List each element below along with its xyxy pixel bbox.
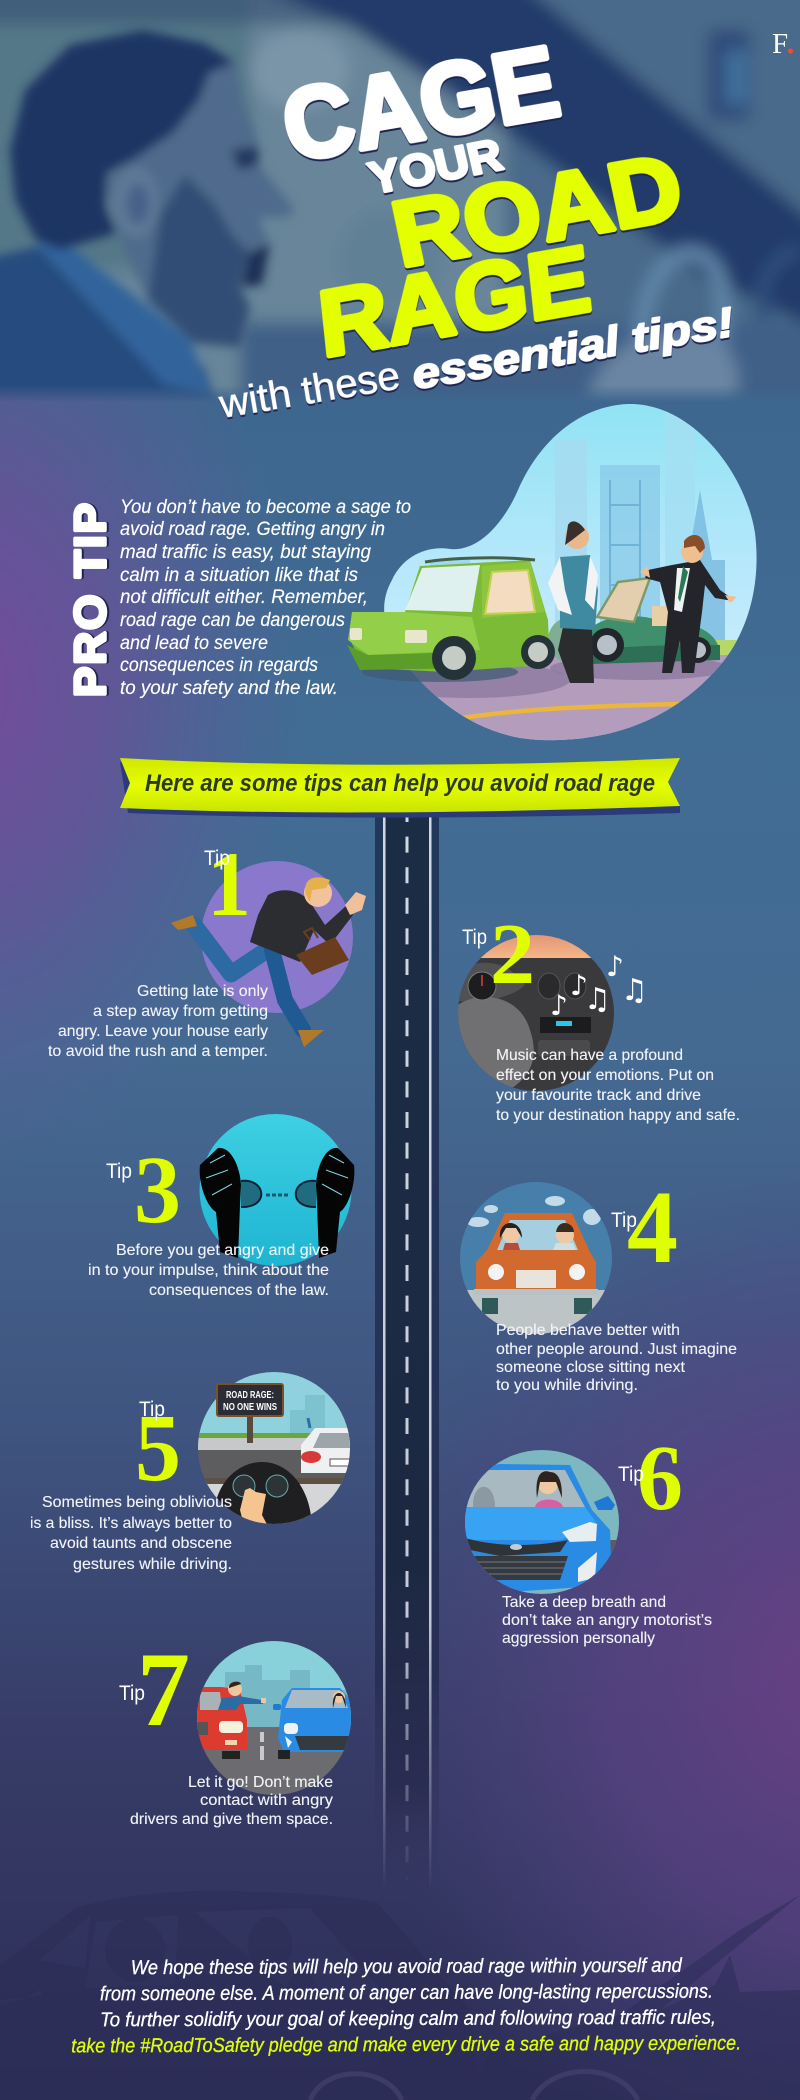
pro tip text: avoid road rage. Getting angry in [120, 519, 385, 540]
tip 5 text: gestures while driving. [73, 1556, 232, 1573]
title: ROAD [384, 134, 691, 287]
pro tip text [120, 497, 411, 699]
tip 1 [48, 833, 366, 1060]
tip 4 label: Tip [611, 1209, 637, 1232]
pro tip text: You don’t have to become a sage to [120, 497, 411, 518]
music notes: ♪ [606, 950, 624, 983]
tip 3 [88, 1114, 354, 1299]
tip 6 text: Take a deep breath and [502, 1594, 666, 1611]
music notes: ♪ [550, 989, 568, 1022]
tip 4 [455, 1170, 737, 1394]
tip 1 text: a step away from getting [93, 1003, 268, 1020]
tip 5 text: Sometimes being oblivious [42, 1494, 232, 1511]
tip 6 number: 6 [637, 1427, 683, 1530]
tip 5 label: Tip [139, 1398, 165, 1421]
tip 7 label: Tip [119, 1682, 145, 1705]
header photo: shouting driver [0, 0, 800, 440]
tip 4 number: 4 [627, 1170, 678, 1285]
light green car [347, 558, 555, 682]
tip 1 text: Getting late is only [137, 983, 268, 1000]
pro tip heading: PRO TIP [66, 501, 115, 697]
footer steering wheels [310, 2072, 638, 2100]
tip 3 text: in to your impulse, think about the [88, 1262, 329, 1279]
tip 5 [30, 1370, 355, 1573]
tip 1 text: to avoid the rush and a temper. [48, 1043, 268, 1060]
banner [120, 758, 680, 818]
tip 4 picture: couple in orange car [460, 1182, 612, 1334]
tip 3 text: Before you get angry and give [116, 1242, 329, 1259]
tip 5 picture: sign, car and steering wheel [195, 1370, 355, 1530]
tip 5 text: is a bliss. It’s always better to [30, 1515, 232, 1532]
tip 3 text: consequences of the law. [149, 1282, 329, 1299]
tip 2 text: effect on your emotions. Put on [496, 1067, 714, 1084]
tip 1 text: angry. Leave your house early [58, 1023, 268, 1040]
music notes [550, 950, 648, 1022]
tip 4 text: to you while driving. [496, 1377, 638, 1394]
tip 7 picture: two cars arguing [195, 1640, 355, 1797]
tip 2 text [496, 1047, 740, 1124]
title: YOUR [364, 130, 507, 204]
tip 2 [458, 926, 739, 1124]
tip 4 text: People behave better with [496, 1322, 680, 1339]
tip 2 text: your favourite track and drive [496, 1087, 701, 1104]
banner: Here are some tips can help you avoid road rage [145, 770, 655, 797]
tip 6 text: aggression personally [502, 1630, 655, 1647]
closing text: We hope these tips will help you avoid road rage within yourself and [131, 1955, 683, 1979]
handcuffed fists [200, 1148, 354, 1258]
tip 6 label: Tip [618, 1463, 644, 1486]
tip 4 text: someone close sitting next [496, 1359, 686, 1376]
tip 3 label: Tip [106, 1160, 132, 1183]
tip 7 text [130, 1774, 333, 1828]
road [375, 800, 439, 1895]
tip 7 [119, 1631, 355, 1828]
tip 1 label: Tip [204, 847, 230, 870]
title: with these [215, 353, 403, 427]
dark green car [548, 578, 720, 664]
tip 5 number: 5 [135, 1394, 181, 1501]
pro tip text: road rage can be dangerous [120, 610, 345, 631]
title: CAGE [274, 26, 567, 183]
tip 7 text: contact with angry [200, 1792, 333, 1809]
pro tip text: mad traffic is easy, but staying [120, 542, 371, 563]
tip 3 text [88, 1242, 329, 1299]
tip 6 [465, 1447, 712, 1646]
title: essential tips! [409, 298, 737, 398]
pro tip text: and lead to severe [120, 633, 268, 654]
closing text: take the #RoadToSafety pledge and make every drive a safe and happy experience. [71, 2033, 741, 2057]
logo: F [772, 28, 788, 60]
tip 3 number: 3 [134, 1136, 181, 1243]
music notes: ♫ [584, 982, 611, 1017]
title: RAGE [314, 226, 595, 377]
tip 1 picture circle [201, 861, 353, 1013]
pro tip text: consequences in regards [120, 655, 318, 676]
closing text: from someone else. A moment of anger can have long-lasting repercussions. [100, 1981, 713, 2005]
road sign [217, 1384, 283, 1416]
tip 2 label: Tip [462, 926, 487, 949]
running man with briefcase [171, 877, 366, 1047]
man in waistcoat [548, 521, 598, 683]
tip 7 text: drivers and give them space. [130, 1811, 333, 1828]
closing text: To further solidify your goal of keeping calm and following road traffic rules, [100, 2007, 716, 2031]
tip 3 picture circle [200, 1114, 352, 1266]
tip 1 number: 1 [207, 833, 251, 935]
tip 5 text [30, 1494, 232, 1573]
tip 6 text [502, 1594, 712, 1647]
tip 5 text: avoid taunts and obscene [50, 1535, 232, 1552]
man in black suit [640, 535, 737, 673]
tip 2 text: Music can have a profound [496, 1047, 683, 1064]
footer car silhouette [0, 1891, 800, 2100]
title [215, 26, 737, 427]
tip 2 text: to your destination happy and safe. [496, 1107, 740, 1124]
tip 1 text [48, 983, 268, 1060]
road sign: NO ONE WINS [223, 1402, 277, 1413]
tip 7 text: Let it go! Don’t make [188, 1774, 333, 1791]
road sign: ROAD RAGE: [226, 1390, 274, 1401]
pro tip text: calm in a situation like that is [120, 565, 358, 586]
tip 4 text: other people around. Just imagine [496, 1341, 737, 1358]
tip 2 picture: dashboard [458, 935, 614, 1091]
pro tip text: not difficult either. Remember, [120, 587, 368, 608]
music notes: ♪ [570, 969, 588, 1002]
closing text [71, 1955, 741, 2057]
tip 7 number: 7 [137, 1631, 190, 1748]
tip 6 text: don’t take an angry motorist’s [502, 1612, 712, 1629]
pro tip illustration blob: two drivers arguing [347, 400, 770, 750]
music notes: ♫ [621, 973, 648, 1008]
tip 6 picture: woman in blue car [465, 1450, 619, 1594]
tip 4 text [496, 1322, 737, 1394]
tip 2 number: 2 [490, 905, 535, 1002]
pro tip text: to your safety and the law. [120, 678, 338, 699]
